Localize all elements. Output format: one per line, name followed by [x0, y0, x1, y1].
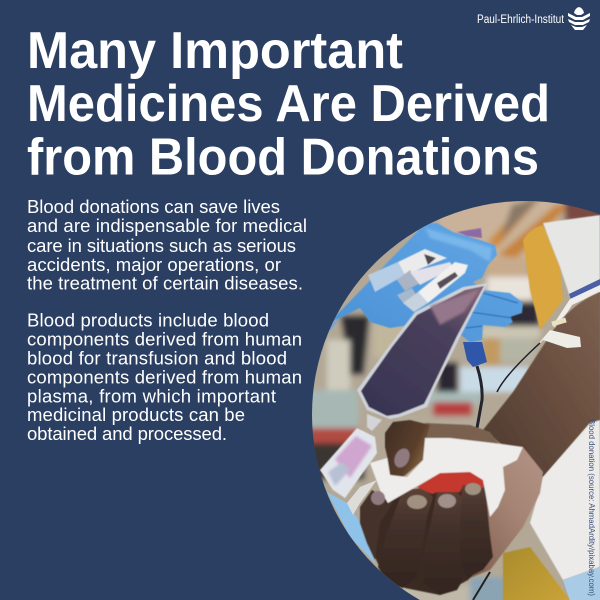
- thumb: [385, 420, 430, 477]
- text block: blood products: Blood products include blood: [27, 310, 269, 330]
- photo: blood donation in circular crop: [300, 190, 600, 600]
- text block: why donations matter: care in situations such as serious: [27, 235, 296, 256]
- arm tape: [538, 330, 581, 348]
- text block: why donations matter: and are indispensable for medical: [27, 215, 307, 236]
- yellow robe: [523, 225, 563, 330]
- yellow blanket: [503, 547, 570, 600]
- title: from Blood Donations: [27, 128, 539, 186]
- text block: blood products: [27, 310, 302, 444]
- red stress ball: [417, 472, 484, 494]
- text block: blood products: obtained and processed.: [27, 423, 227, 444]
- white cloth under fingers: [347, 480, 377, 515]
- donor hand with gauze: [360, 420, 543, 595]
- tube clamp and lines: [463, 320, 566, 428]
- finger nails: [371, 446, 481, 509]
- gauze: [370, 438, 523, 517]
- text block: blood products: components derived from human: [27, 328, 302, 350]
- title: Medicines Are Derived: [27, 75, 550, 133]
- pinky finger: [360, 490, 393, 560]
- text block: why donations matter: [27, 196, 307, 294]
- blue sleeve stripe: [569, 279, 600, 300]
- text block: why donations matter: the treatment of certain diseases.: [27, 272, 303, 294]
- palm: [470, 443, 544, 578]
- text block: blood products: medicinal products can be: [27, 404, 245, 425]
- logo: Paul-Ehrlich-Institut: [477, 7, 590, 30]
- title: Many Important: [27, 22, 403, 80]
- tube under hand: [473, 572, 490, 600]
- middle finger: [431, 492, 462, 596]
- text block: blood products: blood for transfusion and blood: [27, 348, 287, 368]
- white bed quilt: [530, 420, 600, 580]
- tube port: [367, 414, 382, 431]
- back of hand above gauze: [425, 423, 500, 445]
- sleeve lower edge: [553, 285, 600, 330]
- icon: institute emblem: [568, 7, 590, 30]
- title: [27, 22, 550, 186]
- syringe: [320, 428, 377, 498]
- donor arm: [483, 292, 600, 477]
- blood sample tubes: [368, 249, 468, 312]
- text block: blood products: plasma, from which important: [27, 386, 276, 406]
- index finger: [460, 480, 493, 578]
- logo text: Paul-Ehrlich-Institut: [477, 14, 565, 26]
- text block: blood products: components derived from human: [27, 366, 302, 388]
- dark base under fingers: [374, 488, 490, 596]
- text block: why donations matter: Blood donations can save lives: [27, 196, 280, 217]
- photo background: [300, 190, 600, 600]
- blue gown sleeve: [327, 492, 375, 563]
- white shirt: [543, 215, 600, 297]
- ring finger: [378, 488, 433, 588]
- light blue sheet: [563, 567, 600, 600]
- blood bag: [357, 283, 488, 431]
- text block: why donations matter: accidents, major operations, or: [27, 254, 281, 275]
- blue glove hand: [328, 222, 524, 342]
